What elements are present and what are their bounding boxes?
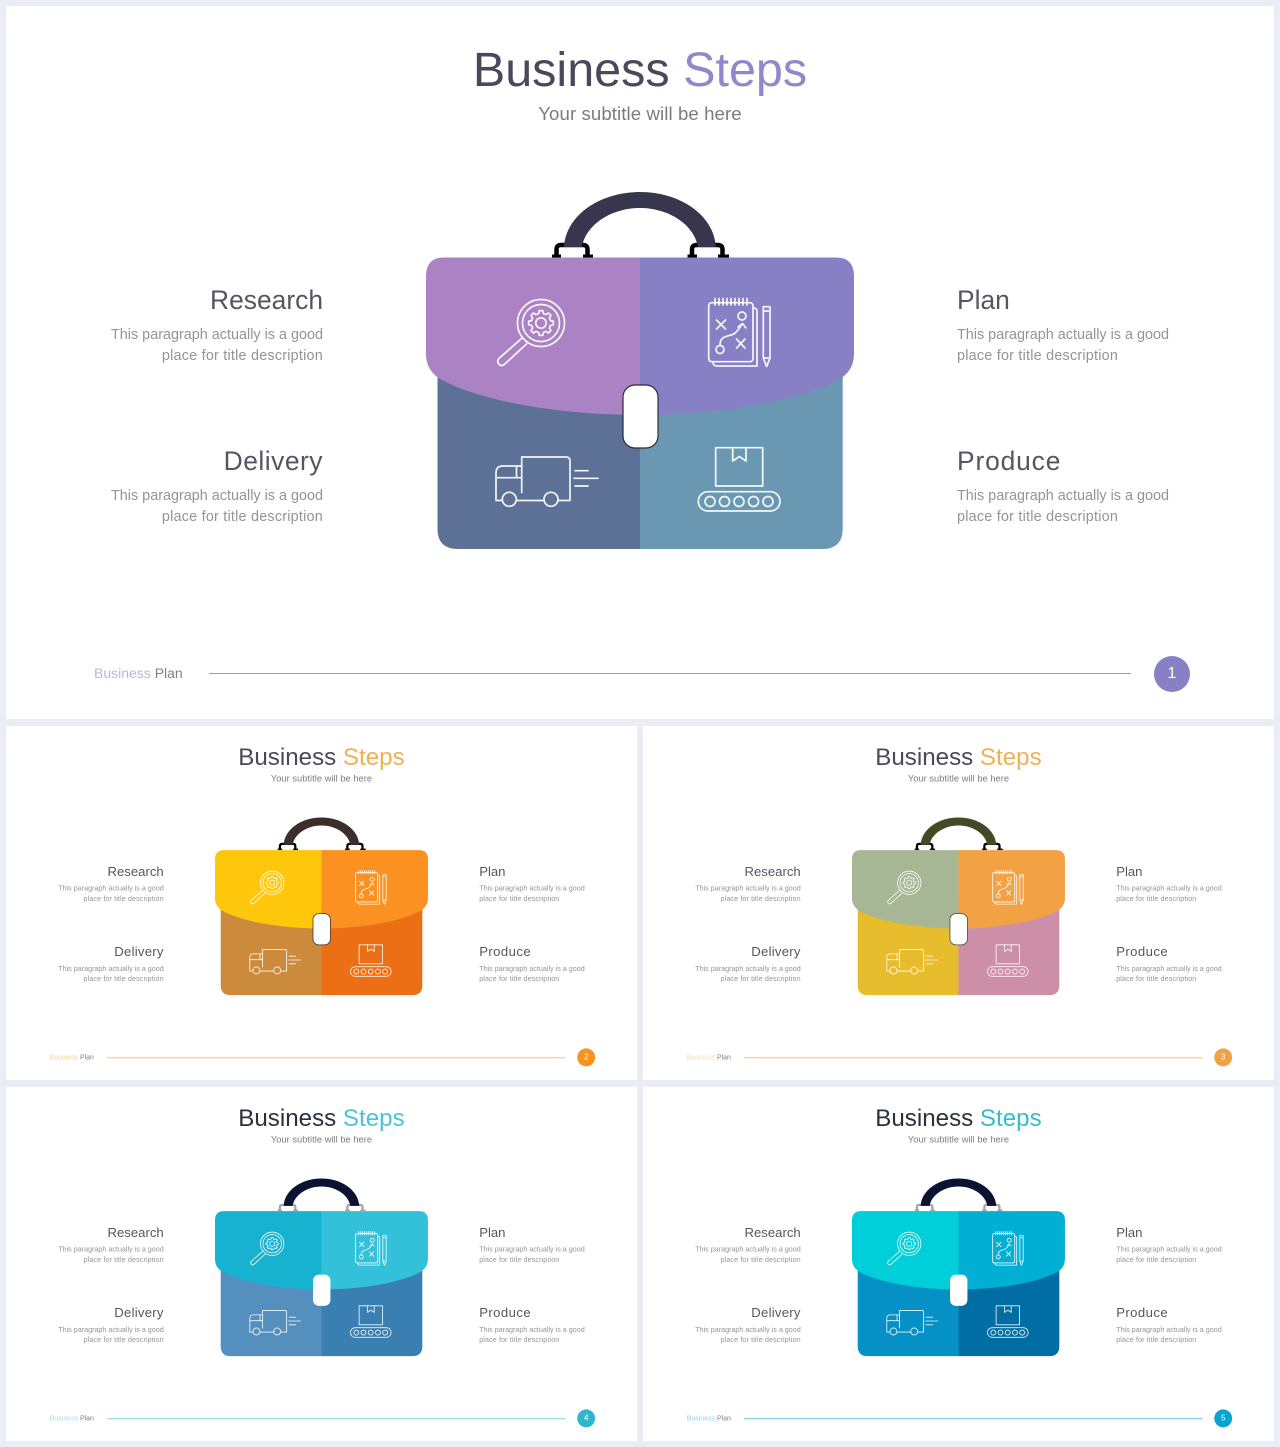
title: Business Steps	[238, 743, 405, 770]
text block: produce: Produce	[957, 446, 1061, 476]
footer line	[744, 1057, 1203, 1058]
body quadrant: delivery	[221, 901, 321, 995]
text block: plan	[1116, 864, 1222, 903]
page number badge	[1214, 1048, 1232, 1066]
text block: plan: place for title description	[479, 1256, 559, 1264]
text block: delivery: Delivery	[751, 1305, 801, 1320]
text block: delivery	[695, 1305, 801, 1344]
clasp	[950, 914, 967, 945]
text block: produce: place for title description	[479, 1336, 559, 1344]
text block: research: place for title description	[721, 1256, 801, 1264]
text block: delivery: place for title description	[721, 975, 801, 983]
title: Business Steps	[875, 743, 1042, 770]
body quadrant: produce	[321, 901, 422, 995]
flap quadrant: plan	[958, 1211, 1065, 1290]
footer label: Business Plan	[50, 1053, 94, 1061]
text block: plan: place for title description	[1116, 895, 1196, 903]
briefcase illustration	[852, 818, 1065, 996]
text block: plan: place for title description	[1116, 1256, 1196, 1264]
text block: plan	[957, 285, 1169, 364]
text block: plan: place for title description	[957, 348, 1118, 364]
title: Business Steps	[473, 43, 807, 97]
footer line	[107, 1057, 566, 1058]
text block: produce: This paragraph actually is a good	[957, 488, 1169, 504]
text block: plan: Plan	[1116, 864, 1142, 879]
flap quadrant: research	[426, 258, 640, 415]
text block: research	[58, 864, 164, 903]
flap quadrant: research	[852, 850, 958, 929]
text block: research	[111, 285, 323, 364]
body quadrant: produce	[958, 901, 1059, 995]
text block: produce: Produce	[479, 944, 531, 959]
clasp	[313, 1275, 330, 1306]
icon: delivery truck	[250, 949, 301, 974]
text block: produce: Produce	[479, 1305, 531, 1320]
text block: plan: This paragraph actually is a good	[1116, 1246, 1222, 1254]
briefcase illustration	[852, 1178, 1065, 1356]
icon: research magnifier	[888, 871, 921, 904]
text block: produce: place for title description	[957, 508, 1118, 524]
subtitle: Your subtitle will be here	[908, 773, 1009, 784]
text block: research: Research	[210, 285, 323, 315]
briefcase illustration	[214, 818, 428, 996]
icon: delivery truck	[496, 457, 598, 506]
page number badge: 2	[584, 1053, 588, 1061]
title: Business Steps	[875, 1104, 1042, 1131]
page number badge	[577, 1409, 595, 1427]
title: Business Steps	[238, 1104, 405, 1131]
text block: produce: place for title description	[1116, 1336, 1196, 1344]
text block: delivery: Delivery	[224, 446, 323, 476]
text block: research: This paragraph actually is a good	[695, 1246, 801, 1254]
footer label: Business Plan	[687, 1414, 731, 1422]
text block: produce	[1116, 1305, 1222, 1344]
icon: research magnifier	[251, 1232, 284, 1265]
text block: delivery: This paragraph actually is a good	[695, 965, 801, 973]
text block: delivery: place for title description	[721, 1336, 801, 1344]
text block: delivery: place for title description	[162, 508, 323, 524]
footer line	[107, 1418, 566, 1419]
icon: research magnifier	[251, 871, 284, 904]
text block: plan: This paragraph actually is a good	[479, 1246, 585, 1254]
icon: plan notepad	[993, 1232, 1023, 1265]
panel: main slide (purple)	[6, 6, 1274, 719]
text block: plan: This paragraph actually is a good	[957, 327, 1169, 343]
panel: slide 5 (deep blue)	[643, 1087, 1274, 1441]
text block: research: This paragraph actually is a good	[58, 885, 164, 893]
flap quadrant: research	[852, 1211, 958, 1290]
icon: plan notepad	[993, 871, 1023, 904]
page number badge	[1214, 1409, 1232, 1427]
icon: produce conveyor	[698, 448, 780, 511]
panel: slide 2 (orange)	[6, 726, 637, 1080]
text block: plan: This paragraph actually is a good	[479, 885, 585, 893]
text block: delivery: place for title description	[84, 1336, 164, 1344]
subtitle: Your subtitle will be here	[271, 1134, 372, 1145]
text block: produce: This paragraph actually is a good	[1116, 1326, 1222, 1334]
icon: plan notepad	[356, 871, 386, 904]
text block: delivery: This paragraph actually is a good	[58, 1326, 164, 1334]
footer label: Business Plan	[687, 1053, 731, 1061]
text block: research	[58, 1225, 164, 1264]
text block: delivery	[111, 446, 323, 524]
panel: slide 3 (muted multicolour)	[643, 726, 1274, 1080]
text block: delivery: place for title description	[84, 975, 164, 983]
text block: plan: Plan	[479, 864, 505, 879]
text block: research: place for title description	[162, 348, 323, 364]
text block: research: Research	[108, 864, 164, 879]
briefcase illustration	[426, 192, 854, 549]
flap quadrant: research	[215, 850, 321, 929]
footer line	[209, 673, 1131, 674]
text block: research: place for title description	[721, 895, 801, 903]
briefcase handle	[278, 1179, 366, 1211]
flap quadrant: plan	[640, 258, 854, 415]
icon: research magnifier	[888, 1232, 921, 1265]
text block: delivery: Delivery	[114, 944, 164, 959]
text block: produce: Produce	[1116, 944, 1168, 959]
text block: produce	[1116, 944, 1222, 983]
panel: slide 4 (light blue)	[6, 1087, 637, 1441]
text block: produce	[957, 446, 1169, 524]
footer label: Business Plan	[94, 665, 183, 681]
text block: produce: This paragraph actually is a good	[479, 1326, 585, 1334]
icon: produce conveyor	[350, 1306, 391, 1337]
subtitle: Your subtitle will be here	[538, 103, 742, 124]
briefcase handle	[278, 818, 366, 850]
briefcase illustration	[214, 1178, 428, 1356]
text block: delivery	[695, 944, 801, 983]
body quadrant: delivery	[438, 360, 640, 549]
flap quadrant: plan	[958, 850, 1065, 929]
text block: research: This paragraph actually is a good	[111, 327, 323, 343]
text block: delivery	[58, 1305, 164, 1344]
text block: delivery	[58, 944, 164, 983]
clasp	[313, 914, 330, 945]
text block: research: This paragraph actually is a good	[695, 885, 801, 893]
body quadrant: delivery	[858, 1262, 958, 1356]
clasp	[623, 385, 658, 448]
subtitle: Your subtitle will be here	[908, 1134, 1009, 1145]
page number badge	[577, 1048, 595, 1066]
text block: delivery: This paragraph actually is a good	[111, 488, 323, 504]
flap quadrant: research	[215, 1211, 321, 1290]
body quadrant: delivery	[858, 901, 958, 995]
flap quadrant: plan	[321, 1211, 428, 1290]
icon: produce conveyor	[987, 1306, 1028, 1337]
clasp	[950, 1275, 967, 1306]
page number badge: 3	[1221, 1053, 1225, 1061]
page number badge: 4	[584, 1414, 588, 1422]
icon: delivery truck	[250, 1310, 301, 1335]
text block: delivery: This paragraph actually is a good	[695, 1326, 801, 1334]
text block: plan: Plan	[479, 1225, 505, 1240]
subtitle: Your subtitle will be here	[271, 773, 372, 784]
text block: research: This paragraph actually is a good	[58, 1246, 164, 1254]
text block: plan	[479, 1225, 585, 1264]
text block: produce: Produce	[1116, 1305, 1168, 1320]
text block: plan	[1116, 1225, 1222, 1264]
text block: delivery: This paragraph actually is a good	[58, 965, 164, 973]
text block: research: place for title description	[84, 895, 164, 903]
icon: produce conveyor	[987, 945, 1028, 976]
text block: research: place for title description	[84, 1256, 164, 1264]
text block: plan: place for title description	[479, 895, 559, 903]
text block: research	[695, 864, 801, 903]
text block: delivery: Delivery	[114, 1305, 164, 1320]
briefcase handle	[915, 1179, 1003, 1211]
text block: plan: Plan	[957, 285, 1010, 315]
text block: plan	[479, 864, 585, 903]
flap quadrant: plan	[321, 850, 428, 929]
text block: produce: This paragraph actually is a good	[1116, 965, 1222, 973]
text block: produce: place for title description	[1116, 975, 1196, 983]
icon: plan notepad	[709, 298, 770, 366]
text block: research: Research	[745, 1225, 801, 1240]
body quadrant: produce	[321, 1262, 422, 1356]
text block: research: Research	[745, 864, 801, 879]
text block: produce	[479, 1305, 585, 1344]
text block: produce	[479, 944, 585, 983]
body quadrant: delivery	[221, 1262, 321, 1356]
text block: research	[695, 1225, 801, 1264]
icon: plan notepad	[356, 1232, 386, 1265]
briefcase handle	[552, 192, 729, 257]
footer line	[744, 1418, 1203, 1419]
text block: plan: Plan	[1116, 1225, 1142, 1240]
text block: research: Research	[108, 1225, 164, 1240]
body quadrant: produce	[958, 1262, 1059, 1356]
text block: delivery: Delivery	[751, 944, 801, 959]
text block: produce: This paragraph actually is a good	[479, 965, 585, 973]
icon: produce conveyor	[350, 945, 391, 976]
page number badge: 1	[1168, 665, 1176, 682]
icon: research magnifier	[498, 300, 564, 366]
text block: plan: This paragraph actually is a good	[1116, 885, 1222, 893]
page number badge: 5	[1221, 1414, 1225, 1422]
footer label: Business Plan	[50, 1414, 94, 1422]
icon: delivery truck	[887, 949, 938, 974]
briefcase handle	[915, 818, 1003, 850]
page number badge	[1154, 656, 1190, 692]
body quadrant: produce	[640, 360, 843, 549]
text block: produce: place for title description	[479, 975, 559, 983]
icon: delivery truck	[887, 1310, 938, 1335]
